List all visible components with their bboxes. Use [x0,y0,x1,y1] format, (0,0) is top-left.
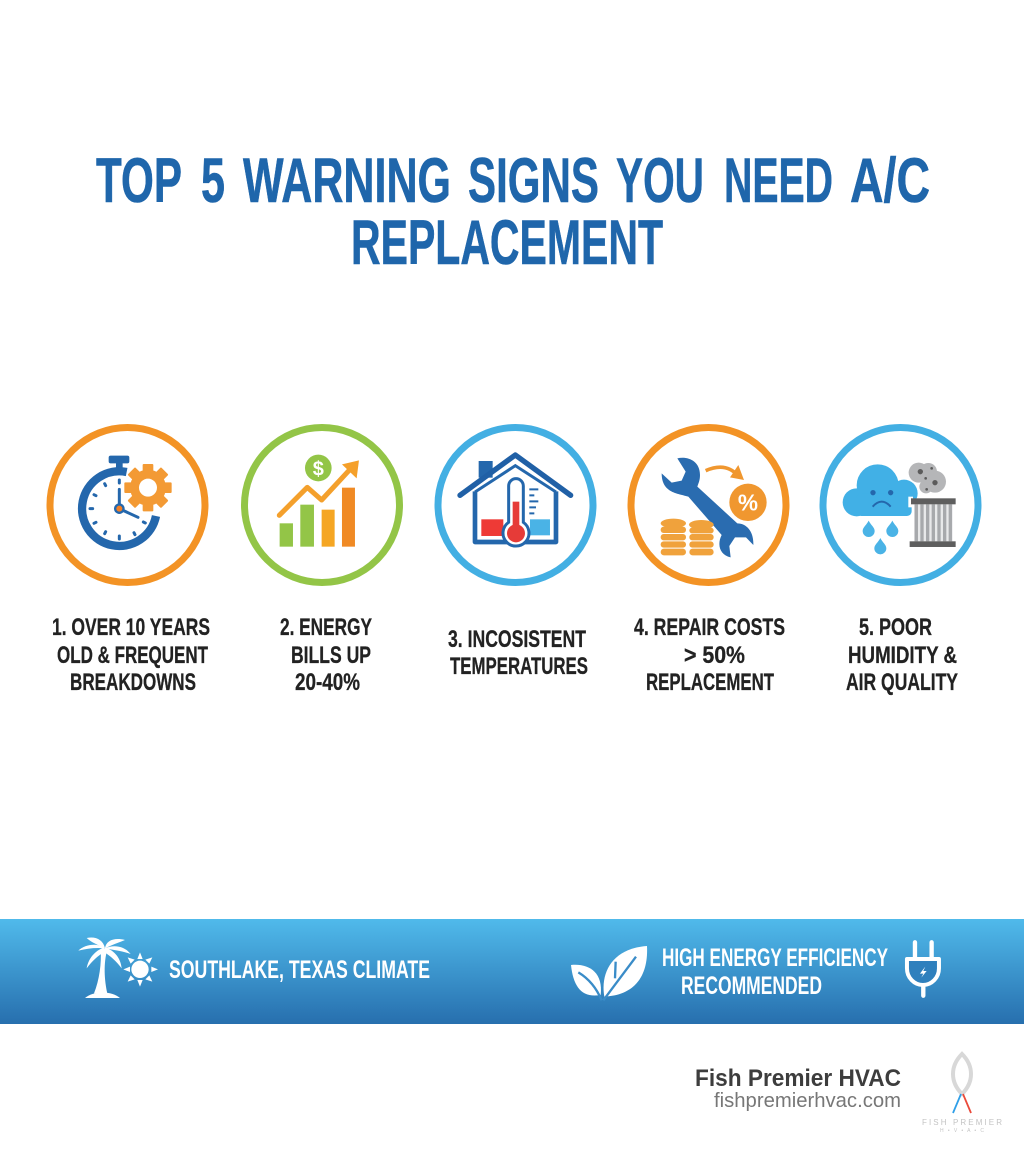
title: YOU [616,146,704,216]
panel: sign 1 [50,428,210,696]
label: OLD & FREQUENT [57,642,208,669]
title: A/C [850,146,930,216]
icon: stopwatch and gear [82,456,172,546]
logo [922,1054,1002,1134]
label: 20-40% [295,669,360,696]
label: AIR QUALITY [846,669,958,696]
title: WARNING [243,146,451,216]
icon: leaves [571,946,647,1000]
icon ring: blue circle [438,428,593,582]
label: 4. REPAIR COSTS [634,614,785,641]
icon: sad cloud and dirty filter [843,463,956,554]
text: efficiency: RECOMMENDED [681,972,822,1000]
label: 1. OVER 10 YEARS [52,614,210,641]
icon: wrench, coins and percent: % [738,490,758,516]
label [634,614,785,696]
icon: plug [907,942,939,996]
label: BREAKDOWNS [70,669,196,696]
label: 2. ENERGY [280,614,372,641]
footer brand text [695,1065,901,1112]
text: efficiency [662,944,888,1000]
footer brand text: Fish Premier HVAC [695,1065,901,1092]
label [280,614,372,696]
logo: FISH PREMIER [922,1118,1002,1127]
label: > 50% [684,642,745,669]
panel: sign 3 [438,428,593,680]
title: 5 [201,146,225,216]
banner background [0,919,1024,1024]
icon: rising bills chart: $ [313,458,324,480]
text: efficiency: HIGH ENERGY EFFICIENCY [662,944,888,972]
label: TEMPERATURES [450,653,588,680]
title: NEED [724,146,833,216]
label: HUMIDITY & [848,642,957,669]
title: REPLACEMENT [351,208,663,278]
icon: palm tree and sun [78,937,158,998]
icon: house with thermometer [460,455,571,546]
icon ring: orange circle [631,428,786,582]
label [448,626,588,680]
icon ring: blue circle [823,428,978,582]
icon: rising bills chart [279,455,359,547]
panel: sign 4 [631,428,786,696]
panel: sign 5 [823,428,978,696]
icon ring: green circle [244,428,400,582]
title: TOP [96,146,182,216]
panel: sign 2 [244,428,400,696]
icon: wrench, coins and percent [661,458,767,557]
title: SIGNS [468,146,599,216]
label [846,614,958,696]
label [52,614,210,696]
label: REPLACEMENT [646,669,774,696]
logo: H • V • A • C [940,1128,984,1134]
text: climate: SOUTHLAKE, TEXAS CLIMATE [169,956,430,984]
icon ring: orange circle [50,428,205,582]
label: BILLS UP [291,642,371,669]
label: 5. POOR [859,614,932,641]
title [96,146,930,278]
footer brand text: fishpremierhvac.com [714,1090,901,1112]
banner [0,919,1024,1024]
label: 3. INCOSISTENT [448,626,586,653]
